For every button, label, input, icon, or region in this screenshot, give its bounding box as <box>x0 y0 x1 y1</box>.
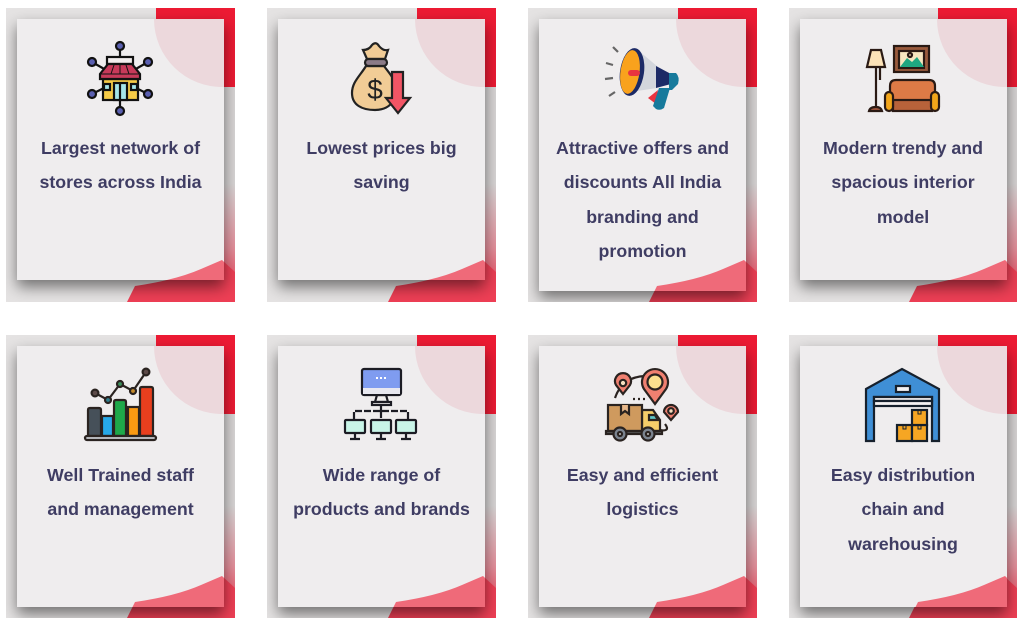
text: distribution and warehousing: warehousing <box>848 534 958 554</box>
text: distribution and warehousing: Easy distribution <box>831 465 975 485</box>
text: lowest prices: Lowest prices big <box>306 138 457 158</box>
text: trained staff: Well Trained staff <box>47 465 194 485</box>
text: products and brands <box>293 465 470 519</box>
panel: largest network <box>6 8 234 302</box>
text: lowest prices: saving <box>353 172 410 192</box>
icon: megaphone <box>604 46 679 110</box>
text: lowest prices <box>306 138 457 192</box>
panel: trained staff <box>6 335 234 618</box>
panel: distribution and warehousing <box>788 335 1017 618</box>
text: products and brands: Wide range of <box>323 465 440 485</box>
text: interior model: model <box>877 207 929 227</box>
panel: products and brands <box>267 335 496 618</box>
text: distribution and warehousing <box>831 465 975 554</box>
text: products and brands: products and brands <box>293 499 470 519</box>
text: distribution and warehousing: chain and <box>862 499 944 519</box>
text: interior model <box>823 138 983 227</box>
panel: offers and promotion <box>528 8 756 302</box>
text: trained staff <box>47 465 194 519</box>
panel: logistics <box>528 335 756 618</box>
text: interior model: spacious interior <box>831 172 975 192</box>
text: trained staff: and management <box>47 499 194 519</box>
text: largest network: stores across India <box>39 172 202 192</box>
icon: lamp, picture and sofa <box>866 44 940 112</box>
icon: store network <box>86 40 154 116</box>
text: logistics: Easy and efficient <box>567 465 718 485</box>
icon: money bag with down arrow: $ <box>367 74 383 105</box>
text: offers and promotion: discounts All India <box>564 172 721 192</box>
text: logistics <box>567 465 718 519</box>
panel: interior model <box>788 8 1017 302</box>
text: offers and promotion <box>556 138 729 261</box>
text: interior model: Modern trendy and <box>823 138 983 158</box>
icon: computer network <box>344 368 418 440</box>
icon: bar chart with trend line <box>84 368 158 442</box>
icon: warehouse <box>864 368 940 442</box>
panel: lowest prices <box>267 8 496 302</box>
icon: money bag with down arrow <box>350 42 412 115</box>
text: offers and promotion: promotion <box>599 241 686 261</box>
text: logistics: logistics <box>606 499 679 519</box>
text: offers and promotion: branding and <box>586 207 699 227</box>
text: offers and promotion: Attractive offers and <box>556 138 729 158</box>
icon: delivery truck with map pins <box>604 368 680 442</box>
text: largest network <box>39 138 202 192</box>
text: largest network: Largest network of <box>41 138 200 158</box>
